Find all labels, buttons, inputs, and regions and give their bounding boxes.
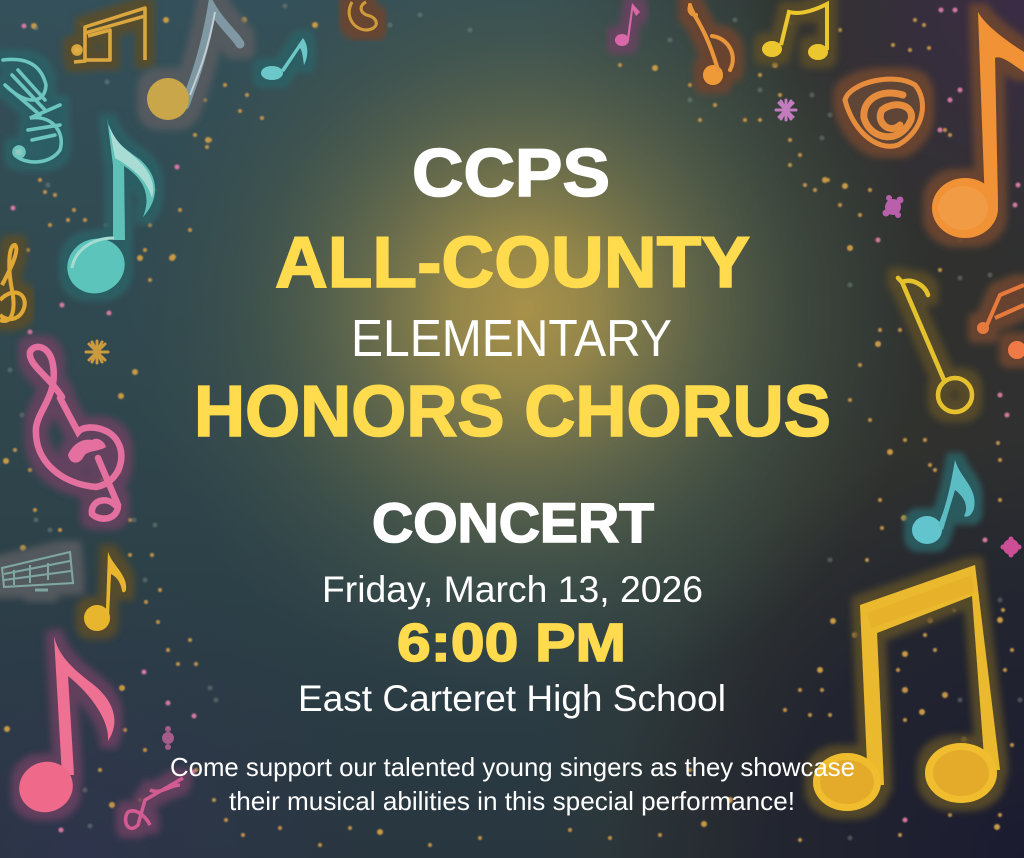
icon: pink treble clef (30, 347, 121, 519)
icon: large gold double note (813, 565, 1000, 811)
text: invitation message: Come support our talented young singers as they showcase (170, 752, 855, 782)
icon: gold ring note (898, 278, 972, 412)
title: CCPS: CCPS (412, 135, 610, 211)
icon: gold double note top right (762, 4, 828, 60)
icon: gold squiggle top (349, 2, 376, 30)
flower specks (86, 100, 1022, 750)
text: invitation message: their musical abilities in this special performance! (229, 786, 795, 816)
icon: orange note top (689, 5, 733, 85)
icon: pink music note large (12, 636, 114, 820)
text: time: 6:00 PM (397, 613, 626, 673)
icon: sheet music strip (2, 552, 73, 590)
icon: orange spiral rose (845, 79, 922, 146)
icon: small gold note left (84, 552, 126, 631)
heading: ALL-COUNTY: ALL-COUNTY (275, 223, 750, 303)
text: invitation message (170, 752, 855, 816)
icon: small pink note top (615, 3, 640, 46)
icon: orange beamed notes right (977, 285, 1024, 359)
text: date: Friday, March 13, 2026 (322, 569, 703, 610)
icon: small teal note right (912, 460, 975, 544)
icon: small teal note (261, 38, 307, 80)
icon: small pink clef (126, 778, 183, 828)
icon: gold beamed notes top (73, 8, 145, 62)
icon: orange music note large (932, 12, 1024, 238)
icon: teal music note large (58, 118, 155, 303)
icon: multicolour music note (147, 8, 240, 120)
text: venue: East Carteret High School (298, 678, 726, 719)
icon: teal treble clef (3, 59, 61, 162)
icon: gold treble clef left (0, 245, 25, 321)
heading: ELEMENTARY: ELEMENTARY (351, 310, 672, 368)
heading: HONORS CHORUS: HONORS CHORUS (194, 372, 831, 452)
heading: CONCERT: CONCERT (372, 491, 654, 554)
